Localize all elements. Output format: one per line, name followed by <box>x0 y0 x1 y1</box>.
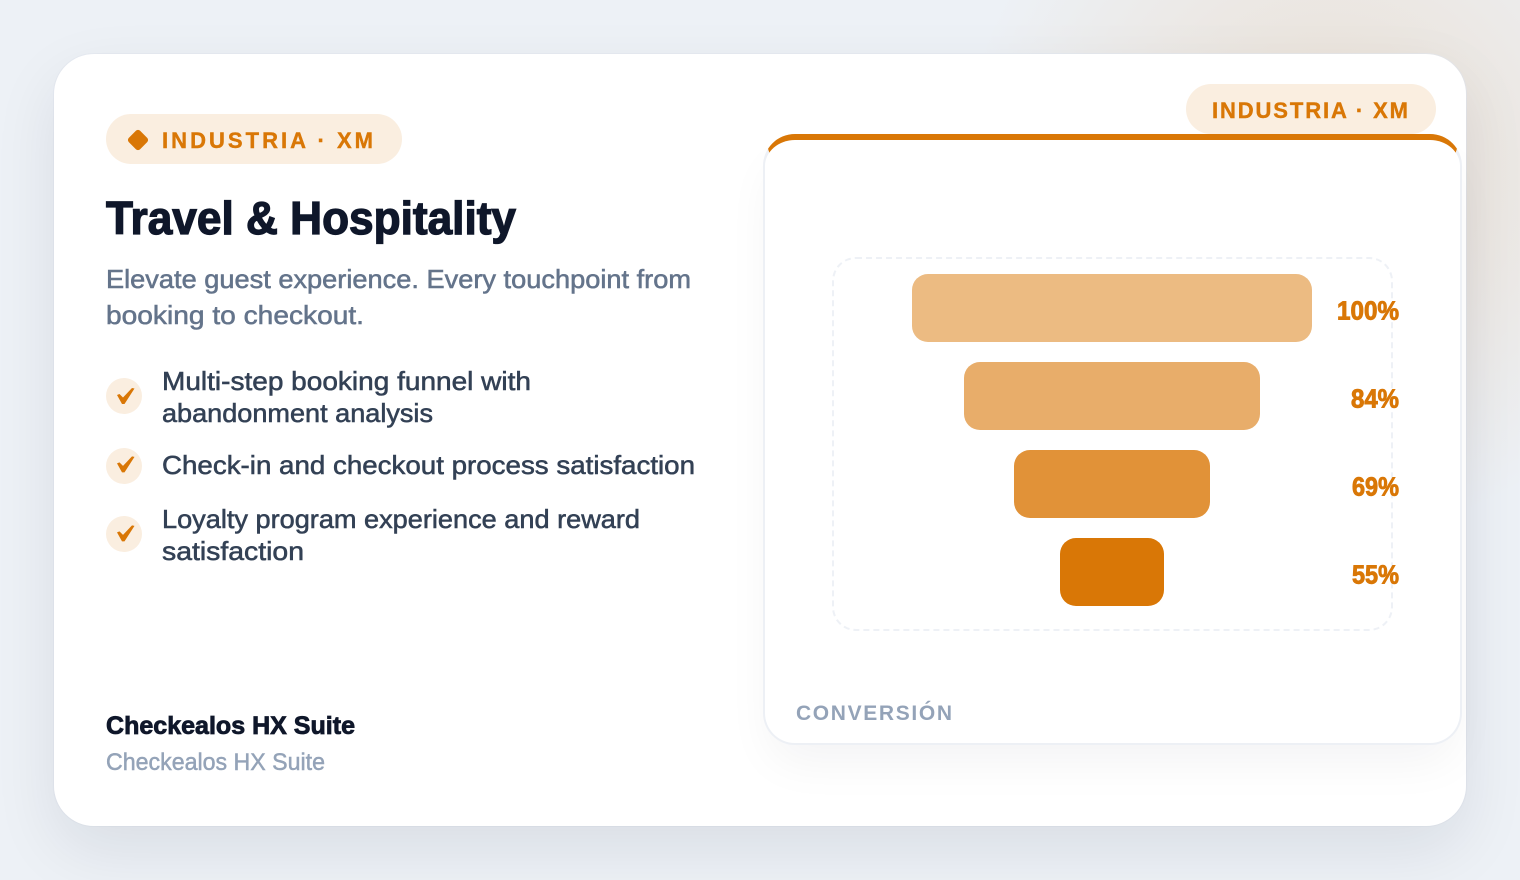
funnel percentage labels: 100% <box>1337 296 1399 326</box>
icon: diamond <box>127 129 149 151</box>
badge: right industry tag: INDUSTRIA · XM <box>1212 98 1408 123</box>
subtitle text block: booking to checkout. <box>106 300 364 330</box>
funnel percentage labels: 55% <box>1352 560 1399 590</box>
badge: left industry tag <box>106 114 402 164</box>
list item: booking funnel: abandonment analysis <box>162 398 433 428</box>
funnel bar 55% <box>1060 538 1164 606</box>
funnel percentage labels: 69% <box>1352 472 1399 502</box>
funnel bar 69% <box>1014 450 1210 518</box>
funnel bar 84% <box>964 362 1260 430</box>
list item: loyalty <box>106 504 640 566</box>
subtitle text block: Elevate guest experience. Every touchpoint from <box>106 264 691 294</box>
list item: loyalty: satisfaction <box>162 536 304 566</box>
panel: funnel chart card <box>763 134 1462 745</box>
funnel bar 100% <box>912 274 1312 342</box>
list item: booking funnel <box>106 366 531 428</box>
chart caption: CONVERSIÓN <box>796 701 952 725</box>
chart frame <box>832 257 1393 631</box>
list item: booking funnel: Multi-step booking funnel with <box>162 366 531 396</box>
badge: right industry tag <box>1186 84 1436 134</box>
funnel percentage labels: 84% <box>1351 384 1399 414</box>
list item: check-in: Check-in and checkout process satisfaction <box>162 450 695 480</box>
footer brand: Checkealos HX Suite <box>106 712 355 740</box>
title: Travel & Hospitality <box>106 192 516 244</box>
badge label: INDUSTRIA · XM <box>162 128 373 153</box>
list item: loyalty: Loyalty program experience and reward <box>162 504 640 534</box>
footer brand: Checkealos HX Suite <box>106 749 325 776</box>
